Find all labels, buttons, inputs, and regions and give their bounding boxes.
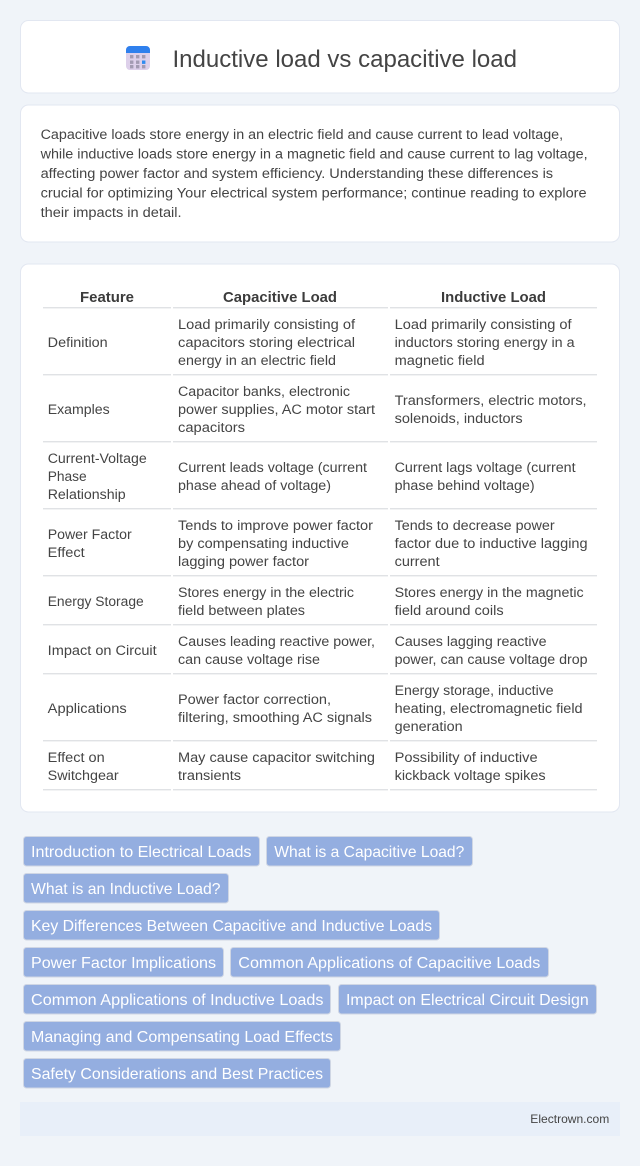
- table row: power factor effect: Effect: [48, 545, 85, 561]
- table row: energy storage: [48, 585, 584, 619]
- tag: capacitive load: What is a Capacitive Load?: [274, 844, 464, 861]
- table row: energy storage: field between plates: [178, 603, 305, 619]
- table row: energy storage: Stores energy in the magnetic: [395, 585, 584, 601]
- table row: definition: capacitors storing electrical: [178, 335, 355, 351]
- table row: impact on circuit: Causes lagging reactive: [395, 634, 547, 650]
- table row: definition: energy in an electric field: [178, 353, 336, 369]
- panel: introduction: [20, 105, 620, 242]
- table row: energy storage: Stores energy in the electric: [178, 585, 354, 601]
- tag: power factor: Power Factor Implications: [31, 955, 216, 972]
- table row: applications: filtering, smoothing AC signals: [178, 710, 372, 726]
- table header row: Inductive Load: [441, 289, 546, 306]
- text block: introduction paragraph: [40, 127, 588, 221]
- table row: definition: Definition: [48, 335, 108, 351]
- table row: impact on circuit: Causes leading reactive power,: [178, 634, 375, 650]
- text block: introduction paragraph: Capacitive loads store energy in an electric field and cause current to lead voltage,: [41, 127, 563, 143]
- table row: examples: Examples: [48, 402, 110, 418]
- table row: examples: Transformers, electric motors,: [395, 393, 587, 409]
- table row: definition: magnetic field: [395, 353, 485, 369]
- table row: impact on circuit: [48, 634, 588, 668]
- table row: definition: inductors storing energy in a: [395, 335, 575, 351]
- table row: power factor effect: by compensating inductive: [178, 536, 349, 552]
- tag: safety: Safety Considerations and Best Practices: [31, 1066, 323, 1083]
- text block: introduction paragraph: their impacts in detail.: [41, 205, 182, 221]
- tag: managing effects: Managing and Compensating Load Effects: [31, 1029, 333, 1046]
- tag: inductive load: [24, 874, 228, 903]
- table row: effect on switchgear: [48, 750, 546, 784]
- table row: examples: solenoids, inductors: [395, 411, 523, 427]
- tag: inductive applications: [24, 984, 330, 1014]
- table row: current-voltage phase relationship: Current leads voltage (current: [178, 460, 367, 476]
- text block: introduction paragraph: while inductive loads store energy in a magnetic field and cause current to lag voltage,: [40, 146, 588, 162]
- table header row: Capacitive Load: [223, 289, 337, 306]
- tag: key differences: Key Differences Between Capacitive and Inductive Loads: [31, 918, 432, 935]
- tag: inductive applications: Common Applications of Inductive Loads: [31, 992, 324, 1009]
- table row: current-voltage phase relationship: phase ahead of voltage): [178, 478, 331, 494]
- tag: capacitive load: [266, 836, 472, 866]
- tag: managing effects: [24, 1022, 340, 1051]
- panel: header: [20, 20, 620, 93]
- table row: power factor effect: Power Factor: [48, 527, 132, 543]
- table row: definition: Load primarily consisting of: [178, 317, 355, 333]
- table row: definition: [48, 317, 575, 369]
- text block: introduction paragraph: crucial for optimizing Your electrical system performance; continue reading to explore: [41, 186, 587, 202]
- table row: energy storage: Energy Storage: [48, 594, 144, 610]
- table row: applications: Applications: [48, 701, 127, 717]
- table row: examples: power supplies, AC motor start: [178, 402, 375, 418]
- table row: current-voltage phase relationship: phase behind voltage): [395, 478, 535, 494]
- table row: applications: generation: [395, 719, 463, 735]
- table row: power factor effect: lagging power factor: [178, 554, 309, 570]
- panel: comparison table: [20, 264, 620, 812]
- tag: safety: [24, 1058, 330, 1088]
- table row: power factor effect: current: [395, 554, 440, 570]
- table row: definition: Load primarily consisting of: [395, 317, 572, 333]
- table header row: [80, 289, 546, 306]
- table row: effect on switchgear: Possibility of inductive: [395, 750, 538, 766]
- table row: impact on circuit: Impact on Circuit: [48, 643, 157, 659]
- table row: applications: Energy storage, inductive: [395, 683, 554, 699]
- table row: current-voltage phase relationship: Phase: [48, 469, 87, 485]
- table row: power factor effect: Tends to decrease power: [395, 518, 555, 534]
- text block: introduction paragraph: affecting power factor and system efficiency. Understanding these differences is: [41, 166, 553, 182]
- table row: energy storage: field around coils: [395, 603, 504, 619]
- table row: current-voltage phase relationship: Current-Voltage: [48, 451, 147, 467]
- table row: impact on circuit: can cause voltage rise: [178, 652, 320, 668]
- tag: introduction: [24, 836, 260, 866]
- table header row: Feature: [80, 289, 134, 306]
- table row: applications: Power factor correction,: [178, 692, 331, 708]
- table row: examples: capacitors: [178, 420, 245, 436]
- footer: [20, 1102, 620, 1136]
- table row: effect on switchgear: transients: [178, 768, 241, 784]
- table row: current-voltage phase relationship: [48, 451, 576, 503]
- table row: current-voltage phase relationship: Current lags voltage (current: [395, 460, 576, 476]
- tag: inductive load: What is an Inductive Load?: [31, 881, 221, 898]
- table row: effect on switchgear: May cause capacitor switching: [178, 750, 375, 766]
- tag: power factor: [24, 948, 224, 977]
- topic tags: [24, 836, 596, 1088]
- table row: power factor effect: Tends to improve power factor: [178, 518, 373, 534]
- table row: examples: Capacitor banks, electronic: [178, 384, 350, 400]
- icon: calculator calendar: [126, 46, 150, 70]
- table row: applications: heating, electromagnetic field: [395, 701, 583, 717]
- footer: Electrown.com: [530, 1112, 609, 1126]
- table row: current-voltage phase relationship: Relationship: [48, 487, 126, 503]
- table row: examples: [48, 384, 587, 436]
- title: Inductive load vs capacitive load: [172, 46, 517, 73]
- tag: circuit design: [338, 984, 596, 1014]
- tag: introduction: Introduction to Electrical Loads: [31, 844, 251, 861]
- tag: capacitive applications: [230, 948, 548, 977]
- table row: power factor effect: factor due to inductive lagging: [395, 536, 588, 552]
- table row: applications: [48, 683, 583, 735]
- table row: effect on switchgear: Switchgear: [48, 768, 119, 784]
- table row: power factor effect: [48, 518, 588, 570]
- tag: key differences: [24, 910, 440, 940]
- table row: effect on switchgear: kickback voltage spikes: [395, 768, 546, 784]
- table row: effect on switchgear: Effect on: [48, 750, 105, 766]
- table row: impact on circuit: power, can cause voltage drop: [395, 652, 588, 668]
- tag: capacitive applications: Common Applications of Capacitive Loads: [238, 955, 540, 972]
- tag: circuit design: Impact on Electrical Circuit Design: [346, 992, 589, 1009]
